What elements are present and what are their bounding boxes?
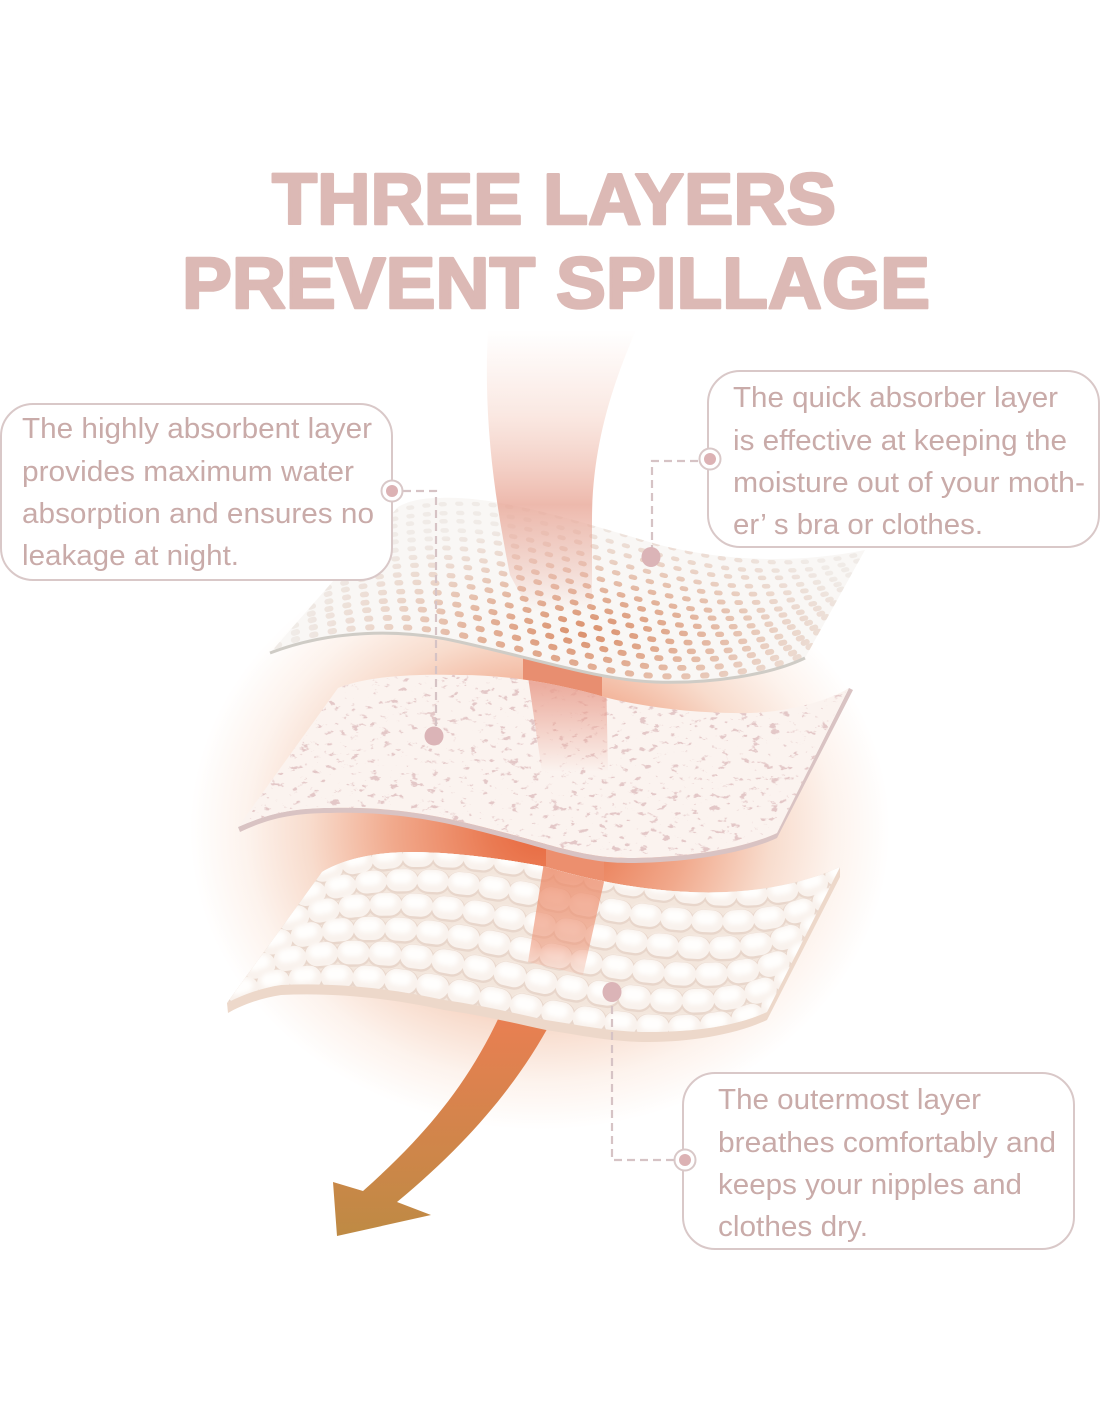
marker xyxy=(700,448,720,470)
callout: highly absorbent layer: The highly absorbent layer xyxy=(22,413,372,445)
marker xyxy=(674,1150,696,1170)
callout: quick absorber layer: The quick absorber layer xyxy=(733,382,1058,414)
layer: outermost quilted sheet xyxy=(227,844,840,1042)
callout: highly absorbent layer: leakage at night. xyxy=(22,540,239,572)
callout: outermost layer: The outermost layer xyxy=(718,1084,981,1116)
callout: quick absorber layer: is effective at keeping the xyxy=(733,425,1067,457)
callout: highly absorbent layer: provides maximum water xyxy=(22,456,354,488)
arrow: liquid flowing out xyxy=(333,1015,552,1236)
layer: quick absorber perforated sheet xyxy=(270,497,865,682)
title: PREVENT SPILLAGE xyxy=(182,244,930,324)
marker xyxy=(382,480,402,502)
background glow xyxy=(190,530,890,1130)
callout: highly absorbent layer xyxy=(1,404,402,580)
callout: quick absorber layer xyxy=(700,371,1099,547)
connector: outermost layer xyxy=(602,982,674,1160)
callout: outermost layer: clothes dry. xyxy=(718,1211,868,1243)
title: THREE LAYERS xyxy=(272,160,836,240)
layer: highly absorbent speckled sheet xyxy=(230,670,860,865)
connector: quick absorber layer xyxy=(642,461,698,567)
flow band on middle layer xyxy=(528,680,608,764)
title xyxy=(182,160,930,324)
connector: highly absorbent layer xyxy=(403,491,444,746)
perforation holes, stained centre xyxy=(325,531,836,680)
callout: quick absorber layer: er’ s bra or clothes. xyxy=(733,509,983,541)
quilted bumps xyxy=(237,844,840,1028)
callout: quick absorber layer: moisture out of your moth- xyxy=(733,467,1085,499)
callout: outermost layer: keeps your nipples and xyxy=(718,1169,1022,1201)
band between middle and bottom layers xyxy=(546,830,604,900)
band between top and middle layers xyxy=(523,650,602,720)
callout: highly absorbent layer: absorption and ensures no xyxy=(22,498,374,530)
flow band on bottom layer xyxy=(528,866,604,975)
callout: outermost layer xyxy=(674,1073,1074,1249)
callout: outermost layer: breathes comfortably and xyxy=(718,1127,1056,1159)
speckle texture xyxy=(250,675,848,856)
flow band over top layer xyxy=(487,330,636,612)
perforation holes, light xyxy=(276,497,863,677)
sheet edge xyxy=(270,633,805,682)
